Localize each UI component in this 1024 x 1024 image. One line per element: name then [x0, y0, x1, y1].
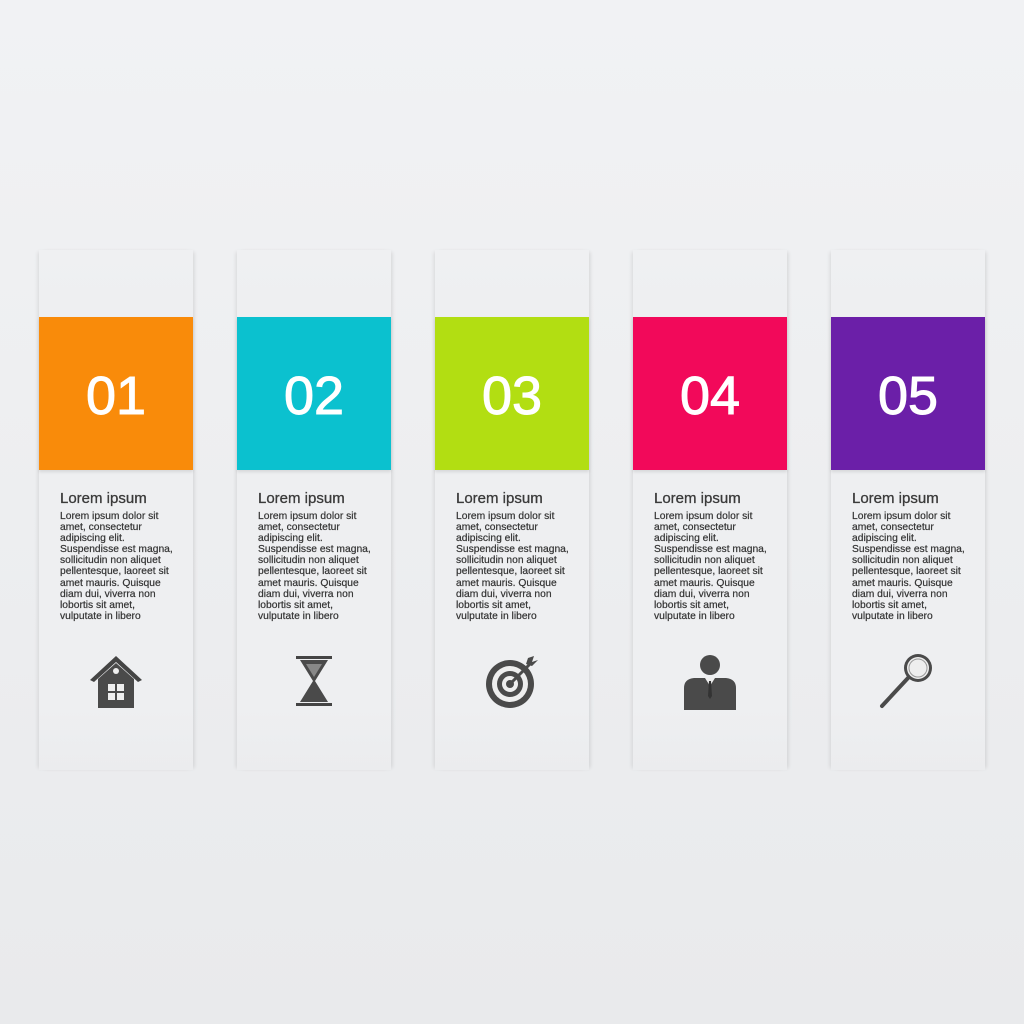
text 4: Lorem ipsum dolor sit	[654, 511, 752, 522]
text 3: diam dui, viverra non	[456, 589, 552, 600]
icon: magnifier	[880, 654, 932, 708]
text 4: pellentesque, laoreet sit	[654, 566, 763, 577]
text 5: adipiscing elit.	[852, 533, 917, 544]
text 2: amet, consectetur	[258, 522, 340, 533]
icon: house	[90, 656, 142, 708]
text 2: vulputate in libero	[258, 611, 339, 622]
text 5: lobortis sit amet,	[852, 600, 927, 611]
text 2: pellentesque, laoreet sit	[258, 566, 367, 577]
text 5: sollicitudin non aliquet	[852, 555, 953, 566]
text 5: Lorem ipsum dolor sit	[852, 511, 950, 522]
text 2: amet mauris. Quisque	[258, 578, 359, 589]
text 3: Suspendisse est magna,	[456, 544, 569, 555]
text 4	[654, 511, 767, 622]
icon: businessman	[684, 655, 736, 710]
number box 02: 02	[284, 366, 344, 426]
text 2: Lorem ipsum dolor sit	[258, 511, 356, 522]
heading 3: Lorem ipsum	[456, 490, 543, 507]
text 2	[258, 511, 371, 622]
text 2: diam dui, viverra non	[258, 589, 354, 600]
text 3: amet, consectetur	[456, 522, 538, 533]
number box 03: 03	[482, 366, 542, 426]
text 5: amet, consectetur	[852, 522, 934, 533]
text 4: adipiscing elit.	[654, 533, 719, 544]
text 5: pellentesque, laoreet sit	[852, 566, 961, 577]
text 4: lobortis sit amet,	[654, 600, 729, 611]
text 5: diam dui, viverra non	[852, 589, 948, 600]
text 1: diam dui, viverra non	[60, 589, 156, 600]
number box 05	[831, 317, 985, 470]
text 3: amet mauris. Quisque	[456, 578, 557, 589]
text 1: amet, consectetur	[60, 522, 142, 533]
column 4	[633, 250, 787, 770]
column 3	[435, 250, 589, 770]
text 3: sollicitudin non aliquet	[456, 555, 557, 566]
column 5	[831, 250, 985, 770]
number box 03	[435, 317, 589, 470]
text 3: pellentesque, laoreet sit	[456, 566, 565, 577]
number box 04	[633, 317, 787, 470]
text 4: amet, consectetur	[654, 522, 736, 533]
text 4: vulputate in libero	[654, 611, 735, 622]
heading 4: Lorem ipsum	[654, 490, 741, 507]
text 3: lobortis sit amet,	[456, 600, 531, 611]
text 4: sollicitudin non aliquet	[654, 555, 755, 566]
text 1: pellentesque, laoreet sit	[60, 566, 169, 577]
number box 01: 01	[86, 366, 146, 426]
text 5: Suspendisse est magna,	[852, 544, 965, 555]
text 4: diam dui, viverra non	[654, 589, 750, 600]
text 5: amet mauris. Quisque	[852, 578, 953, 589]
number box 04: 04	[680, 366, 740, 426]
text 1: adipiscing elit.	[60, 533, 125, 544]
column 1	[39, 250, 193, 770]
icon: target	[486, 656, 538, 708]
text 1: sollicitudin non aliquet	[60, 555, 161, 566]
text 3: vulputate in libero	[456, 611, 537, 622]
text 2: adipiscing elit.	[258, 533, 323, 544]
number box 05: 05	[878, 366, 938, 426]
text 3	[456, 511, 569, 622]
text 2: lobortis sit amet,	[258, 600, 333, 611]
text 1: amet mauris. Quisque	[60, 578, 161, 589]
heading 2: Lorem ipsum	[258, 490, 345, 507]
text 5	[852, 511, 965, 622]
heading 5: Lorem ipsum	[852, 490, 939, 507]
text 4: amet mauris. Quisque	[654, 578, 755, 589]
text 3: Lorem ipsum dolor sit	[456, 511, 554, 522]
text 2: Suspendisse est magna,	[258, 544, 371, 555]
text 1: lobortis sit amet,	[60, 600, 135, 611]
text 1: Lorem ipsum dolor sit	[60, 511, 158, 522]
text 1	[60, 511, 173, 622]
heading 1: Lorem ipsum	[60, 490, 147, 507]
text 2: sollicitudin non aliquet	[258, 555, 359, 566]
number box 01	[39, 317, 193, 470]
text 3: adipiscing elit.	[456, 533, 521, 544]
icon: hourglass	[296, 656, 332, 706]
text 4: Suspendisse est magna,	[654, 544, 767, 555]
column 2	[237, 250, 391, 770]
number box 02	[237, 317, 391, 470]
text 1: vulputate in libero	[60, 611, 141, 622]
text 1: Suspendisse est magna,	[60, 544, 173, 555]
text 5: vulputate in libero	[852, 611, 933, 622]
